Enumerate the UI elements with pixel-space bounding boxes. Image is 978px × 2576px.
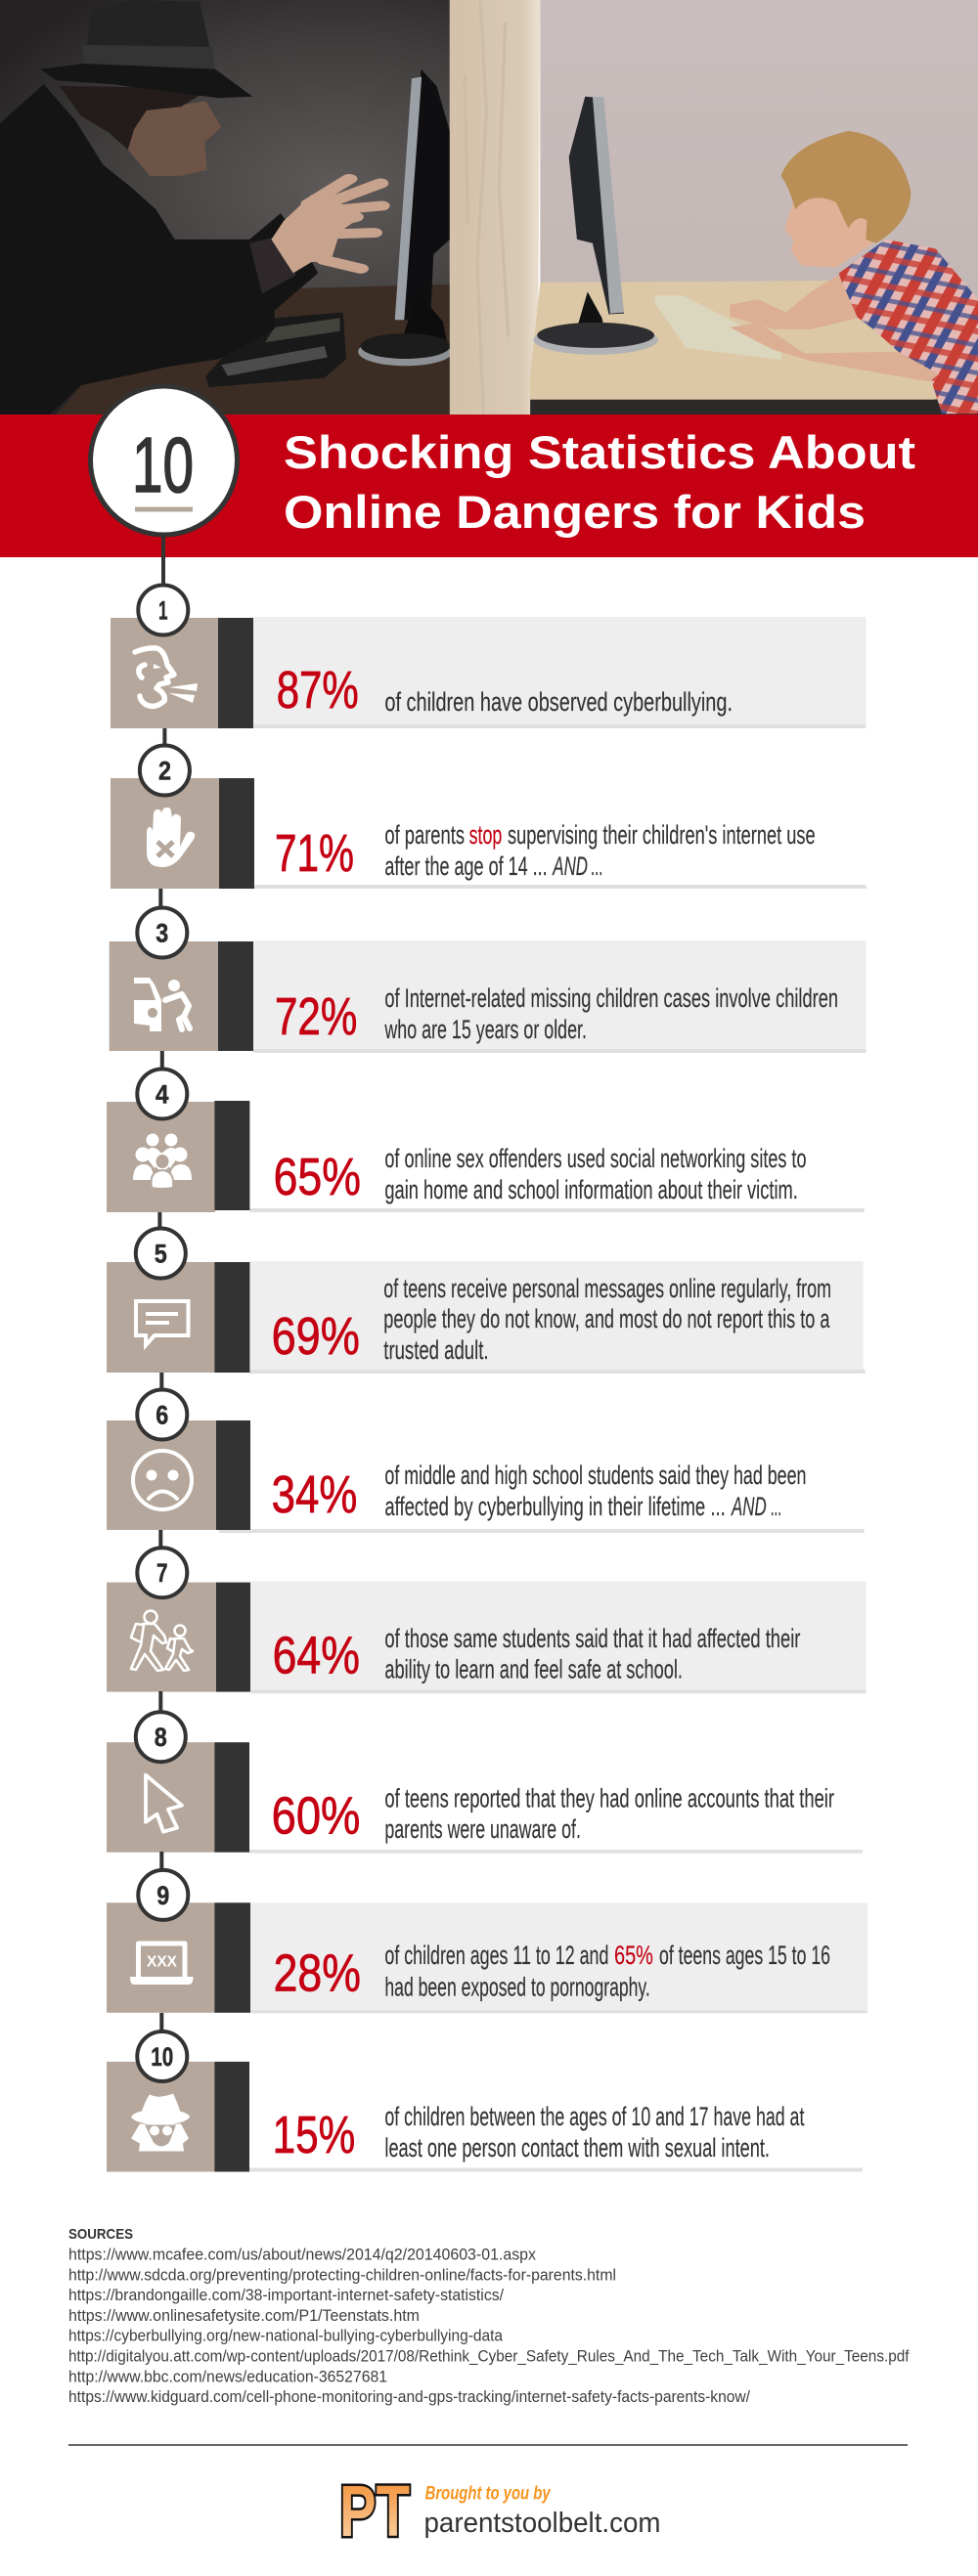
sources: SOURCES [68,2226,133,2243]
brought to you by: Brought to you by [425,2484,552,2505]
hero photo: man and boy at computers [0,0,978,415]
number 8: 8 [155,1723,167,1752]
stat text [384,1784,834,1844]
number 8 [136,1712,186,1762]
connector [158,1691,162,1715]
number 9 [138,1870,188,1920]
icon: spy [131,2094,190,2151]
dark desk [56,284,450,415]
stat text: after the age of 14 ... [384,851,548,881]
connector [159,1373,163,1392]
stat text [384,2102,805,2162]
divider [68,2444,908,2446]
connector [157,1212,161,1232]
stat text: ... [591,851,602,881]
icon: group of people [133,1134,192,1189]
stat value: 34% [272,1465,357,1524]
number 6: 6 [156,1400,168,1429]
number 5 [136,1228,186,1279]
stat value: 64% [273,1627,360,1685]
connector [159,2013,163,2034]
desk front [530,400,942,415]
man's hair [60,86,212,150]
number 6 [137,1390,187,1439]
connector from badge [161,533,165,590]
number 1 [138,585,188,635]
left monitor [358,69,453,366]
connector [159,1852,163,1871]
dark lower backdrop right [873,284,978,415]
stat text: gain home and school information about their victim. [384,1175,798,1204]
stat text: of children have observed cyberbullying. [384,687,733,717]
number 3: 3 [156,919,168,948]
number 4: 4 [156,1079,168,1109]
boy's shirt [839,240,978,414]
stat text: AND [731,1492,767,1521]
stat value: 28% [274,1944,361,2003]
stat text: parents were unaware of. [384,1814,581,1844]
connector [162,728,166,748]
stat text [384,983,838,1044]
sources: https://brandongaille.com/38-important-internet-safety-statistics/ [68,2286,504,2304]
stat text: supervising their children's internet use [508,820,816,850]
stat text: AND [552,851,588,881]
stat text: of parents [384,820,465,850]
panel: stat 4 [107,1101,865,1212]
panel: stat 1 [111,617,867,728]
light desk [530,281,978,400]
stat text: affected by cyberbullying in their lifetime ... [384,1492,726,1521]
icon: sad face [133,1451,192,1509]
panel: stat 5 [107,1261,866,1374]
sources: https://www.mcafee.com/us/about/news/2014/q2/20140603-01.aspx [68,2245,536,2264]
right monitor [533,97,658,355]
man's hands [271,179,381,273]
number 2: 2 [158,757,171,786]
sources: http://digitalyou.att.com/wp-content/uploads/2017/08/Rethink_Cyber_Safety_Rules_And_The_Tech_Talk_With_Your_Teens.pdf [68,2346,910,2366]
stat value: 65% [274,1148,361,1206]
number 2 [140,745,190,796]
right wall [540,0,978,299]
connector [158,889,162,909]
icon: child abduction [134,978,190,1031]
title [284,426,915,538]
stat text [384,1461,806,1521]
stat text: least one person contact them with sexual intent. [384,2133,770,2162]
stat text: ... [771,1492,781,1521]
stat text [384,1941,830,2002]
panel: stat 10 [107,2062,863,2172]
number 5: 5 [155,1240,167,1269]
icon: laptop [130,1943,194,1985]
stat text [384,1144,806,1204]
boy's face [784,184,879,268]
badge: 10 [90,386,237,535]
sources: https://www.kidguard.com/cell-phone-monitoring-and-gps-tracking/internet-safety-facts-parents-know/ [68,2387,750,2406]
wooden partition [450,0,540,415]
stat text: 65% [614,1941,653,1970]
right keyboard [655,295,781,360]
stat value: 15% [273,2106,355,2164]
parentstoolbelt.com: parentstoolbelt.com [424,2508,661,2539]
left dark background [0,0,450,415]
boy's hair [781,131,911,243]
number 10 [137,2031,187,2081]
connector [160,1051,164,1071]
number 9: 9 [156,1881,169,1910]
boy's arms [730,275,939,381]
stat text [383,1274,831,1365]
icon: talking head [135,648,198,706]
stat text: of teens ages 15 to 16 [659,1941,830,1970]
stat value: 69% [272,1307,360,1366]
stat value: 71% [275,824,354,883]
panel: stat 2 [111,778,867,889]
badge: 10: 10 [132,421,194,508]
number 7 [137,1548,187,1597]
stat text: ability to learn and feel safe at school. [384,1654,683,1683]
man's face [128,101,221,176]
icon: mouse cursor [146,1775,182,1832]
sources: https://www.onlinesafetysite.com/P1/Teenstats.htm [68,2306,420,2325]
man's cuff [249,236,296,293]
number 10: 10 [151,2042,173,2072]
sources: http://www.sdcda.org/preventing/protecting-children-online/facts-for-parents.html [68,2265,616,2284]
connector [158,1530,162,1550]
stat text [384,820,816,881]
panel: stat 8 [107,1742,863,1854]
icon: stop hand [147,808,195,867]
sources [68,2226,910,2406]
stat value: 72% [275,987,357,1046]
title banner [0,415,978,557]
hat [40,0,252,98]
man's coat [0,84,318,415]
stat text: of children ages 11 to 12 and [384,1941,608,1970]
stat text: who are 15 years or older. [384,1015,587,1044]
stat text: stop [469,820,502,850]
title: Shocking Statistics About [284,426,915,478]
icon: walking students [131,1611,193,1671]
panel: stat 7 [107,1581,867,1693]
stat value: 60% [272,1787,360,1846]
title: Online Dangers for Kids [284,486,866,538]
icon: chat bubble [136,1301,188,1345]
sources: https://cyberbullying.org/new-national-bullying-cyberbullying-data [68,2327,503,2345]
panel: stat 9 [107,1902,867,2013]
sources: http://www.bbc.com/news/education-36527681 [68,2367,387,2385]
stat text [384,1624,800,1683]
number 3 [137,907,187,958]
panel: stat 3 [110,940,866,1053]
stat value: 87% [277,661,359,720]
left keyboard [205,313,346,387]
stat text: had been exposed to pornography. [384,1973,650,2002]
number 4 [137,1070,187,1118]
icon: laptop: XXX [147,1953,177,1971]
number 1: 1 [158,596,168,626]
number 7: 7 [156,1558,168,1588]
logo: PT: PT [339,2470,410,2552]
stat text: trusted adult. [383,1335,489,1365]
panel: stat 6 [107,1420,865,1533]
